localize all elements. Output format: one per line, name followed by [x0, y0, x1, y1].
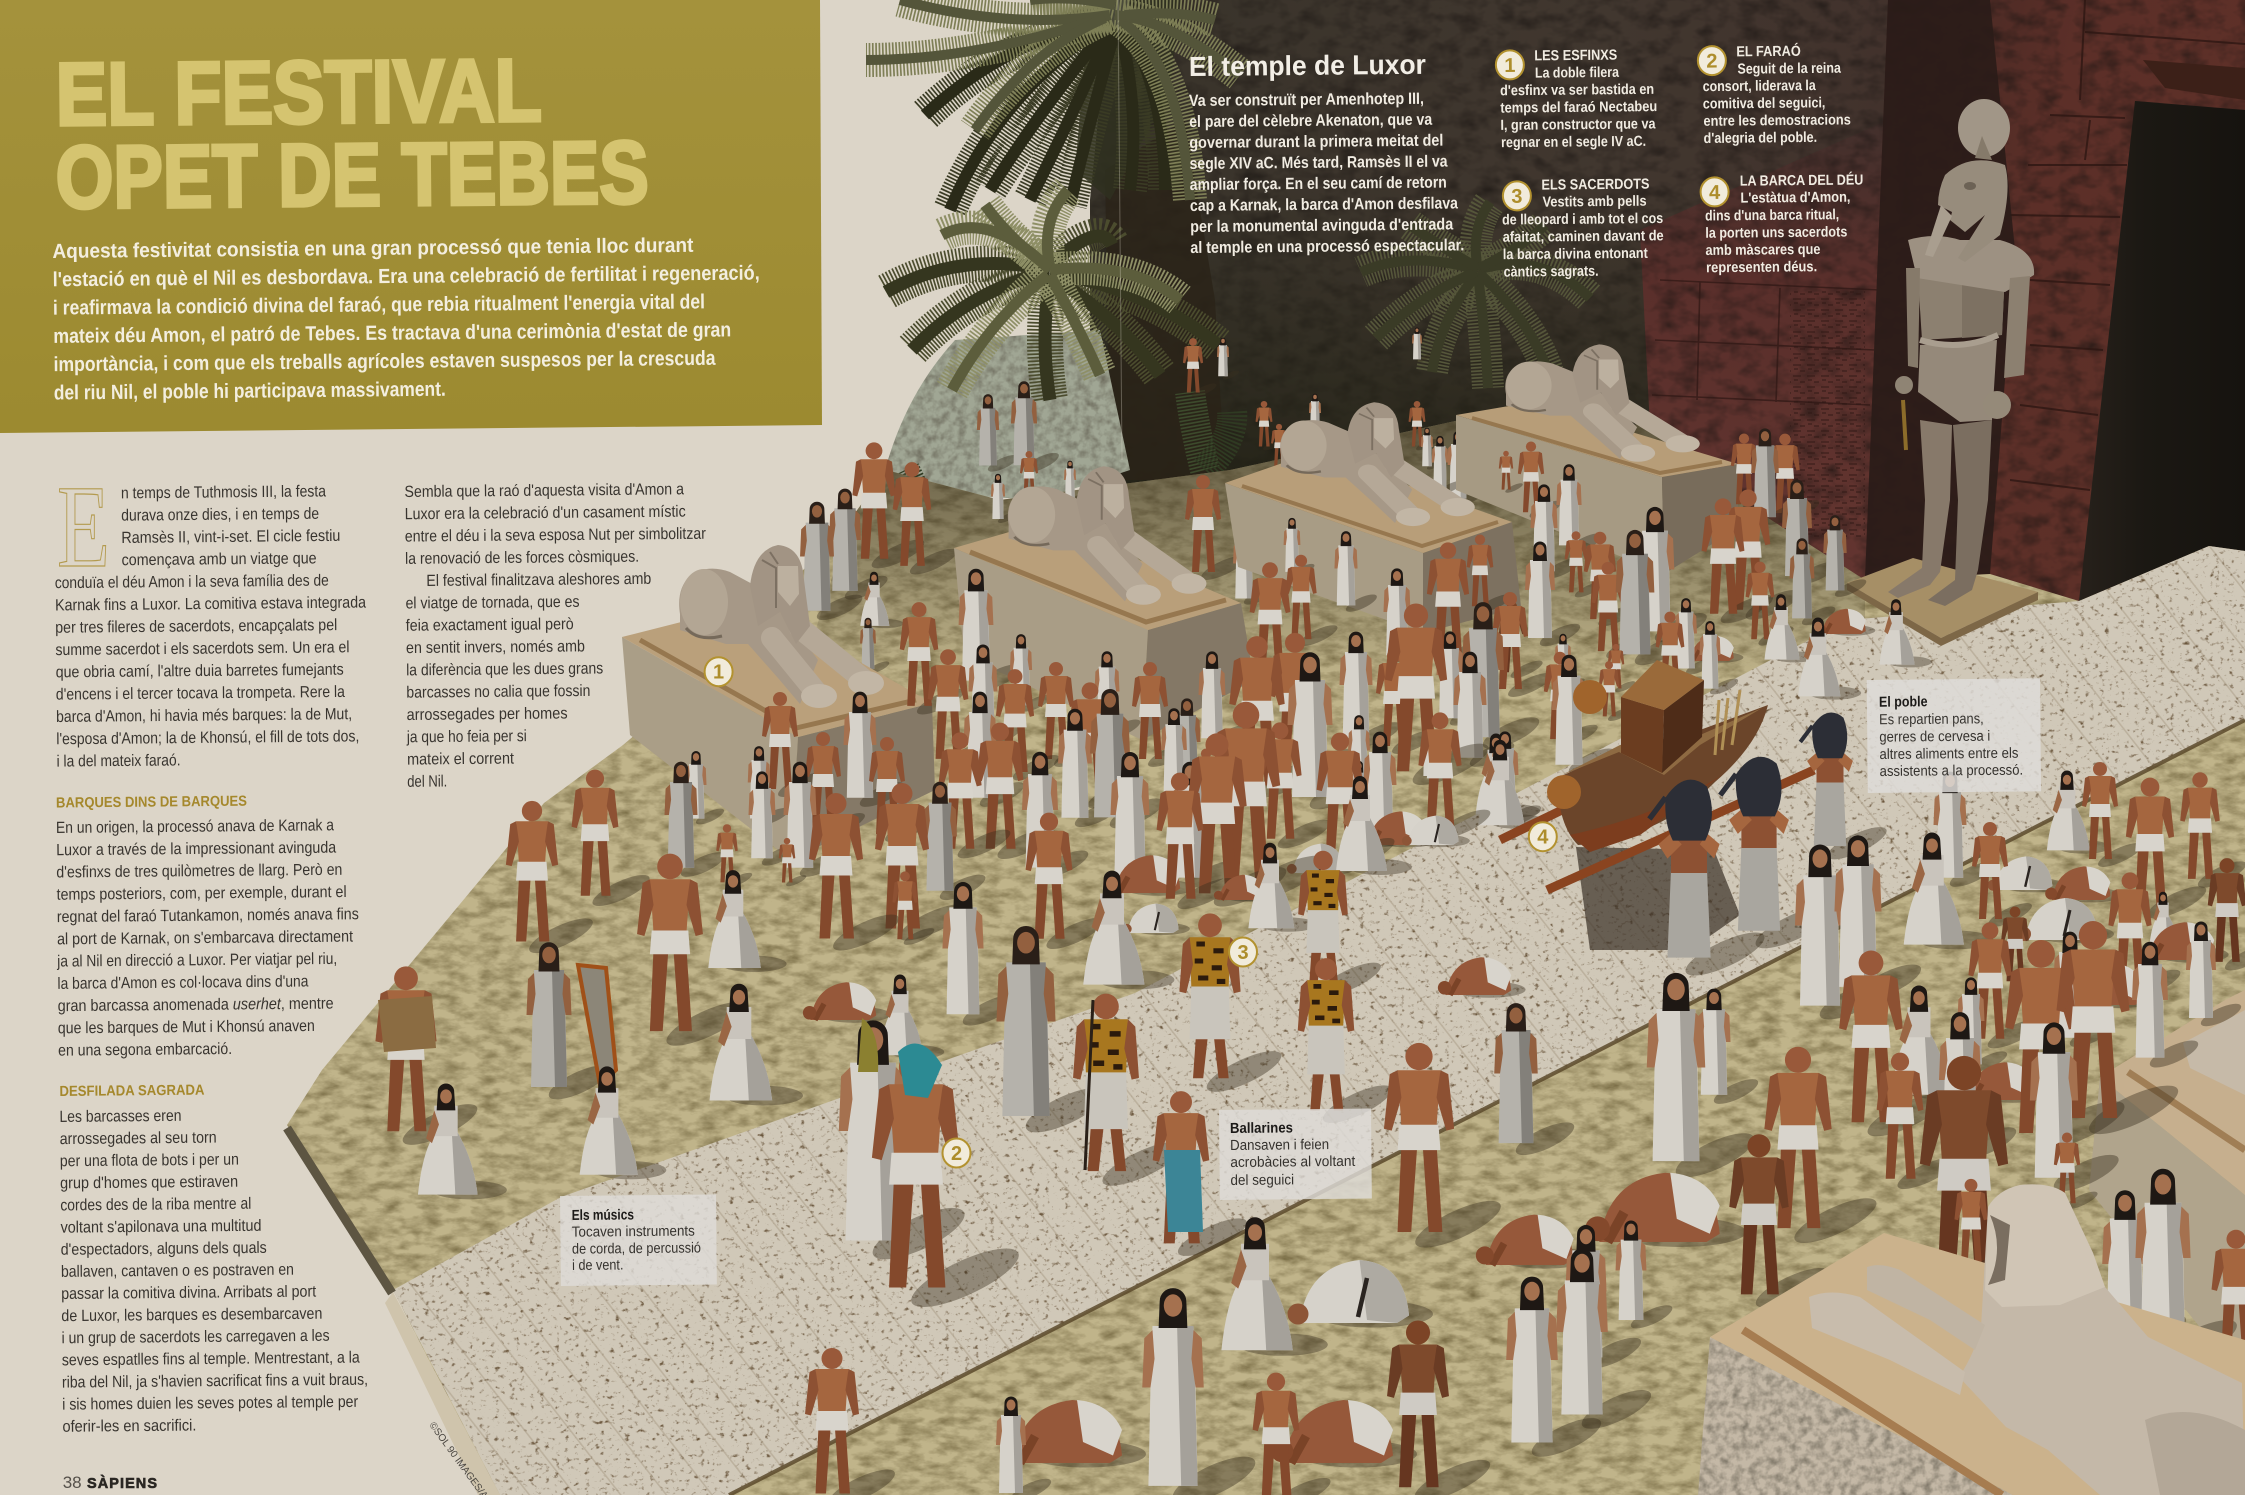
body column 1: desfilada paragraph: i un grup de sacerdots les carregaven a les: [61, 1327, 330, 1347]
sphinx 3: [1280, 402, 1475, 526]
gold title panel: [0, 0, 822, 433]
callout: els músics: Els músics: [572, 1207, 634, 1224]
body column 1: barques paragraph: en una segona embarcació.: [58, 1040, 232, 1060]
body column 1: desfilada paragraph: oferir-les en sacrifici.: [62, 1417, 197, 1436]
body column 2: el viatge de tornada, que es: [405, 593, 580, 612]
callout: el poble: Es repartien pans,: [1879, 711, 1984, 728]
dark doorway: [2079, 101, 2245, 601]
plinth 4: [1456, 402, 1738, 574]
body column 2: Sembla que la raó d'aquesta visita d'Amon a: [404, 480, 685, 501]
foreground-right plinth and sphinx paws: [2089, 990, 2245, 1370]
number badge 1 on the scene: 1: [713, 662, 724, 684]
text: el temple de Luxor: cap a Karnak, la barca d'Amon desfilava: [1190, 194, 1459, 215]
callout: ballarines: [1219, 1109, 1372, 1200]
body column 1: opening paragraph: n temps de Tuthmosis III, la festa: [121, 482, 327, 502]
palm: right tree on dark wall: [1361, 202, 1590, 388]
legend 3: els sacerdots: ELS SACERDOTS: [1541, 177, 1650, 194]
body column 1: barques paragraph: d'esfinxs de tres quilòmetres de llarg. Però en: [56, 861, 342, 881]
body column 2: la diferència que les dues grans: [406, 660, 603, 679]
body column 1: desfilada paragraph: arrossegades al seu torn: [60, 1129, 217, 1148]
body column 2: barcasses no calia que fossin: [406, 682, 590, 702]
body column 1: barques paragraph: temps posteriors, com, per exemple, durant el: [57, 883, 347, 904]
body column 1: opening paragraph: d'encens i el tercer tocava la trompeta. Rere la: [56, 683, 346, 704]
fold line: [1118, 0, 1122, 460]
body column 1: desfilada paragraph: grup d'homes que estiraven: [60, 1173, 238, 1192]
body column 1: barques paragraph: Luxor a través de la impressionant avinguda: [56, 839, 337, 859]
intro text: del riu Nil, el poble hi participava massivament.: [54, 378, 446, 404]
legend 1: les esfinxs: temps del faraó Nectabeu: [1500, 99, 1657, 117]
page footer: SÀPIENS: [87, 1475, 157, 1492]
body column 1: opening paragraph: conduïa el déu Amon i la seva família des de: [55, 572, 329, 592]
legend 4: la barca del déu: [1700, 171, 1864, 276]
intro text: i reafirmava la condició divina del faraó, que rebia ritualment l'energia vital del: [53, 290, 705, 320]
text: el temple de Luxor: ampliar força. En el seu camí de retorn: [1190, 174, 1447, 194]
red temple pylon with hieroglyphs: [1640, 120, 1888, 582]
plinth 2: [954, 521, 1254, 740]
figures behind the plinths: [800, 327, 1488, 676]
legend 4: la barca del déu: amb màscares que: [1705, 242, 1821, 259]
callout: el poble: altres aliments entre els: [1879, 746, 2019, 763]
legend 3: els sacerdots: afaitat, caminen davant de: [1503, 228, 1664, 246]
page footer: 38: [63, 1473, 82, 1492]
body column 2: entre el déu i la seva esposa Nut per simbolitzar: [405, 525, 706, 546]
body column 2: Luxor era la celebració d'un casament místic: [405, 503, 686, 523]
body column 1: desfilada paragraph: cordes des de la riba mentre al: [60, 1195, 251, 1214]
legend 4: la barca del déu: 4: [1709, 182, 1721, 204]
body column 1: opening paragraph: per tres fileres de sacerdots, encapçalats pel: [55, 616, 337, 637]
body column 1: barques paragraph: que les barques de Mut i Khonsú anaven: [58, 1017, 315, 1037]
terrace stone edge: [287, 1128, 500, 1495]
body column 2: ja que ho feia per si: [406, 727, 527, 746]
callout: ballarines: Dansaven i feien: [1230, 1137, 1329, 1154]
legend 1: les esfinxs: LES ESFINXS: [1534, 48, 1618, 64]
intro text: importància, i com que els treballs agrícoles estaven suspesos per la crescuda: [53, 347, 716, 376]
callout: el poble: assistents a la processó.: [1880, 763, 2023, 780]
crowd: procession and spectators: [506, 428, 2245, 960]
body column 1: desfilada paragraph: d'espectadors, alguns dels quals: [61, 1239, 267, 1259]
text: el temple de Luxor: segle XIV aC. Més tard, Ramsès II el va: [1189, 153, 1448, 173]
body column 1: opening paragraph: [54, 482, 368, 771]
callout: ballarines: del seguici: [1230, 1172, 1294, 1189]
body column 1: desfilada paragraph: seves espatlles fins al temple. Mentrestant, a la: [62, 1349, 361, 1369]
ground: sandy terrace: [287, 420, 2245, 1495]
palm: upper crown: [866, 0, 1240, 210]
body column 1: barques paragraph: [55, 816, 360, 1060]
legend 1: les esfinxs: La doble filera: [1535, 65, 1620, 82]
palm: middle tree: [886, 190, 1218, 400]
number badge 4 on the scene: 4: [1537, 827, 1549, 849]
body column 2: la renovació de les forces còsmiques.: [405, 548, 639, 568]
number badge 4 on the scene: [1529, 822, 1557, 851]
legend 2: el faraó: Seguit de la reina: [1737, 61, 1842, 78]
legend 2: el faraó: 2: [1706, 51, 1718, 73]
body column 1: barques paragraph: regnat del faraó Tutankamon, només anava fins: [57, 905, 359, 926]
rock mound: [880, 330, 1130, 500]
body column 1: desfilada paragraph: riba del Nil, ja s'havien sacrificat fins a vuit braus,: [62, 1371, 368, 1392]
crowd: foreground: [375, 833, 2245, 1495]
foreground sphinx: [1809, 1184, 2245, 1495]
small dark plants: [905, 392, 1232, 580]
text: el temple de Luxor: per la monumental avinguda d'entrada: [1190, 215, 1454, 236]
body column 2: El festival finalitzava aleshores amb: [426, 570, 651, 590]
legend 3: els sacerdots: la barca divina entonant: [1503, 246, 1648, 263]
number badge 2 on the scene: 2: [951, 1143, 962, 1165]
body column 1: barques paragraph: gran barcassa anomenada userhet, mentre: [58, 995, 334, 1015]
callout: els músics: Tocaven instruments: [572, 1224, 695, 1241]
niche shadow behind the statue: [1865, 0, 2015, 580]
legend 2: el faraó: consort, liderava la: [1703, 78, 1817, 95]
body column 1: barques paragraph: al port de Karnak, on s'embarcava directament: [57, 928, 354, 948]
falcon-headed statue with base: [1847, 99, 2038, 646]
body column 2: arrossegades per homes: [407, 704, 568, 724]
body column 1: barques paragraph: la barca d'Amon es col·locava dins d'una: [57, 972, 309, 993]
brick pillar beside the doorway: [1865, 0, 2245, 601]
intro text: mateix déu Amon, el patró de Tebes. Es tractava d'una cerimònia d'estat de gran: [53, 318, 731, 348]
text: el temple de Luxor: al temple en una processó espectacular.: [1190, 236, 1464, 257]
plinth 3: [1225, 452, 1521, 633]
callout: els músics: i de vent.: [572, 1258, 624, 1274]
title: EL FESTIVAL: [55, 40, 542, 144]
body column 1: barques paragraph: ja al Nil en direcció a Luxor. Per viatjar pel riu,: [56, 950, 337, 971]
body column 1: opening paragraph: l'esposa d'Amon; la de Khonsú, el fill de tots dos,: [56, 727, 359, 748]
body column 2: [404, 480, 709, 791]
plinth 1: [622, 603, 935, 860]
number badge 2 on the scene: [942, 1138, 970, 1168]
body column 1: opening paragraph: i la del mateix faraó.: [56, 751, 181, 771]
legend 1: les esfinxs: [1496, 47, 1658, 151]
legend 2: el faraó: [1698, 41, 1851, 147]
body column 1: desfilada paragraph: passar la comitiva divina. Arribats al port: [61, 1283, 317, 1303]
body column 1: desfilada paragraph: i sis homes duien les seves potes al temple per: [62, 1393, 359, 1414]
sacred barque with shrine and carrying poles: [1500, 660, 1814, 950]
legend 3: els sacerdots: Vestits amb pells: [1542, 194, 1647, 211]
text: el temple de Luxor: el pare del cèlebre Akenaton, que va: [1189, 111, 1433, 131]
legend 4: la barca del déu: L'estàtua d'Amon,: [1740, 190, 1851, 207]
number badge 3 on the scene: 3: [1237, 942, 1249, 964]
title: [55, 40, 649, 227]
intro text: Aquesta festivitat consistia en una gran processó que tenia lloc durant: [52, 234, 694, 263]
legend 4: la barca del déu: la porten uns sacerdots: [1705, 224, 1847, 242]
priests carrying the barque in animal masks: [1649, 713, 1890, 984]
legend 1: les esfinxs: d'esfinx va ser bastida en: [1500, 82, 1654, 99]
body column 1: desfilada paragraph: voltant s'apilonava una multitud: [60, 1217, 262, 1237]
title: OPET DE TEBES: [55, 122, 649, 227]
body column 1: opening paragraph: començava amb un viatge que: [122, 549, 317, 569]
temple wall background: [1090, 0, 2245, 620]
legend 3: els sacerdots: de lleopard i amb tot el cos: [1502, 211, 1663, 228]
sphinx 1: [679, 545, 884, 708]
body column 1: desfilada paragraph: ballaven, cantaven o es postraven en: [61, 1261, 294, 1281]
body column 1: desfilada paragraph: Les barcasses eren: [59, 1107, 182, 1126]
legend 2: el faraó: entre les demostracions: [1703, 112, 1851, 130]
legend 4: la barca del déu: representen déus.: [1706, 259, 1817, 276]
legend 4: la barca del déu: dins d'una barca ritual,: [1705, 207, 1839, 224]
body column 2: mateix el corrent: [407, 750, 515, 769]
body column 2: feia exactament igual però: [406, 615, 574, 635]
text: el temple de Luxor: Va ser construït per Amenhotep III,: [1189, 90, 1424, 110]
legend 1: les esfinxs: I, gran constructor que va: [1500, 116, 1656, 134]
body column 1: desfilada paragraph: [59, 1105, 368, 1436]
doorway lintel carving: [2143, 60, 2245, 100]
body column 1: desfilada paragraph: per una flota de bots i per un: [60, 1151, 239, 1170]
body column 1: opening paragraph: barca d'Amon, hi havia més barques: la de Mut,: [56, 705, 352, 726]
heading: el temple de Luxor: El temple de Luxor: [1189, 49, 1426, 82]
back ground shading: [800, 420, 1865, 680]
legend 3: els sacerdots: [1502, 176, 1664, 281]
subheading: desfilada sagrada: DESFILADA SAGRADA: [59, 1083, 205, 1100]
callout: ballarines: acrobàcies al voltant: [1230, 1154, 1355, 1171]
body column 1: opening paragraph: Ramsès II, vint-i-set. El cicle festiu: [121, 527, 340, 547]
intro text: l'estació en què el Nil es desbordava. Era una celebració de fertilitat i regeneració,: [53, 262, 760, 291]
number badge 1 on the scene: [705, 657, 733, 686]
body column 1: desfilada paragraph: de Luxor, les barques es desembarcaven: [61, 1305, 322, 1325]
text: el temple de Luxor: [1189, 89, 1464, 257]
sphinx 2: [1008, 466, 1206, 605]
legend 1: les esfinxs: regnar en el segle IV aC.: [1501, 134, 1646, 151]
paved processional road: [393, 546, 2245, 1495]
legend 1: les esfinxs: 1: [1504, 55, 1516, 77]
text: el temple de Luxor: governar durant la primera meitat del: [1189, 132, 1443, 152]
body column 1: opening paragraph: durava onze dies, i en temps de: [121, 505, 319, 525]
callout: els músics: [560, 1195, 717, 1286]
body column 1: opening paragraph: que obria camí, l'altre duia barretes fumejants: [56, 661, 344, 681]
callout: el poble: gerres de cervesa i: [1879, 729, 1990, 746]
legend 2: el faraó: d'alegria del poble.: [1704, 130, 1817, 147]
legend 2: el faraó: EL FARAÓ: [1736, 42, 1801, 60]
callout: els músics: de corda, de percussió: [572, 1240, 701, 1258]
foreground plinth: [1698, 1233, 2245, 1495]
body column 1: opening paragraph: summe sacerdot i els sacerdots sem. Un era el: [55, 638, 350, 659]
body column 2: en sentit invers, només amb: [406, 637, 585, 657]
callout: el poble: El poble: [1879, 694, 1928, 711]
subheading: barques dins de barques: BARQUES DINS DE BARQUES: [56, 794, 247, 811]
callout: el poble: [1867, 678, 2041, 793]
sphinx 4: [1505, 344, 1700, 462]
legend 2: el faraó: comitiva del seguici,: [1703, 95, 1825, 112]
intro text: [52, 233, 761, 404]
legend 3: els sacerdots: càntics sagrats.: [1504, 264, 1599, 281]
drop cap: E: [57, 461, 110, 592]
legend 4: la barca del déu: LA BARCA DEL DÉU: [1740, 171, 1863, 190]
page footer: [63, 1473, 157, 1492]
legend 3: els sacerdots: 3: [1511, 186, 1523, 208]
body column 1: barques paragraph: En un origen, la processó anava de Karnak a: [56, 816, 335, 837]
number badge 3 on the scene: [1229, 938, 1257, 966]
body column 1: opening paragraph: Karnak fins a Luxor. La comitiva estava integrada: [55, 594, 367, 614]
body column 2: del Nil.: [407, 773, 447, 791]
callout: ballarines: Ballarines: [1230, 1120, 1293, 1137]
